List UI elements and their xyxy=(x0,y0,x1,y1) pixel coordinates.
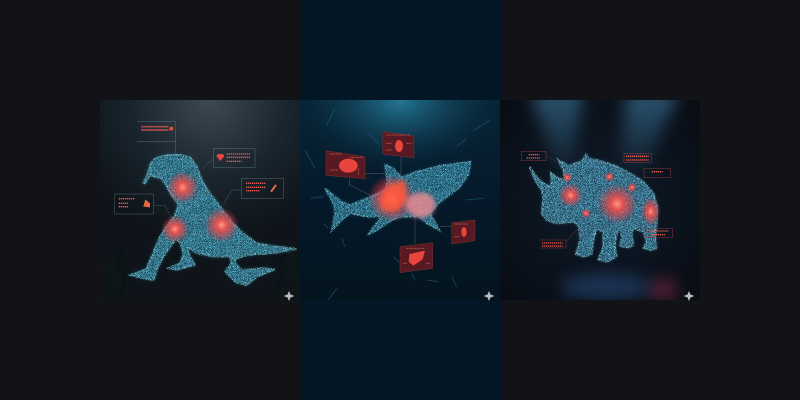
drifting particles xyxy=(305,108,490,300)
rhino red hot spots xyxy=(559,172,661,226)
foliage silhouettes xyxy=(100,250,300,300)
shark red organs xyxy=(368,174,435,222)
komodo red hot spots xyxy=(161,171,239,243)
panel: shark hologram xyxy=(300,100,500,301)
callout: lower left xyxy=(540,228,578,248)
callout: top left xyxy=(521,151,560,163)
callout: muscle label xyxy=(115,194,172,218)
icon: sparkle xyxy=(484,291,494,301)
callout: lower right xyxy=(638,225,672,238)
komodo body xyxy=(130,155,297,285)
callout: reproductive label xyxy=(223,178,283,205)
floor reflection xyxy=(560,273,653,300)
card: liver xyxy=(400,243,433,273)
panel: rhino hologram xyxy=(500,90,700,302)
callout: top right xyxy=(644,168,671,178)
shark body xyxy=(325,162,471,235)
light beams xyxy=(524,100,685,169)
icon: sparkle xyxy=(684,291,694,301)
card: stomach xyxy=(452,220,475,244)
card: brain xyxy=(326,151,365,179)
connector lines xyxy=(349,157,452,243)
callout: heart label xyxy=(203,148,255,168)
card: heart xyxy=(383,132,414,158)
rhino body xyxy=(529,154,657,262)
panel: komodo dragon hologram xyxy=(100,100,300,301)
background: middle blue column xyxy=(301,0,502,400)
callout: top centre xyxy=(615,153,651,168)
icon: sparkle xyxy=(284,291,294,301)
callout: top label xyxy=(137,122,175,153)
